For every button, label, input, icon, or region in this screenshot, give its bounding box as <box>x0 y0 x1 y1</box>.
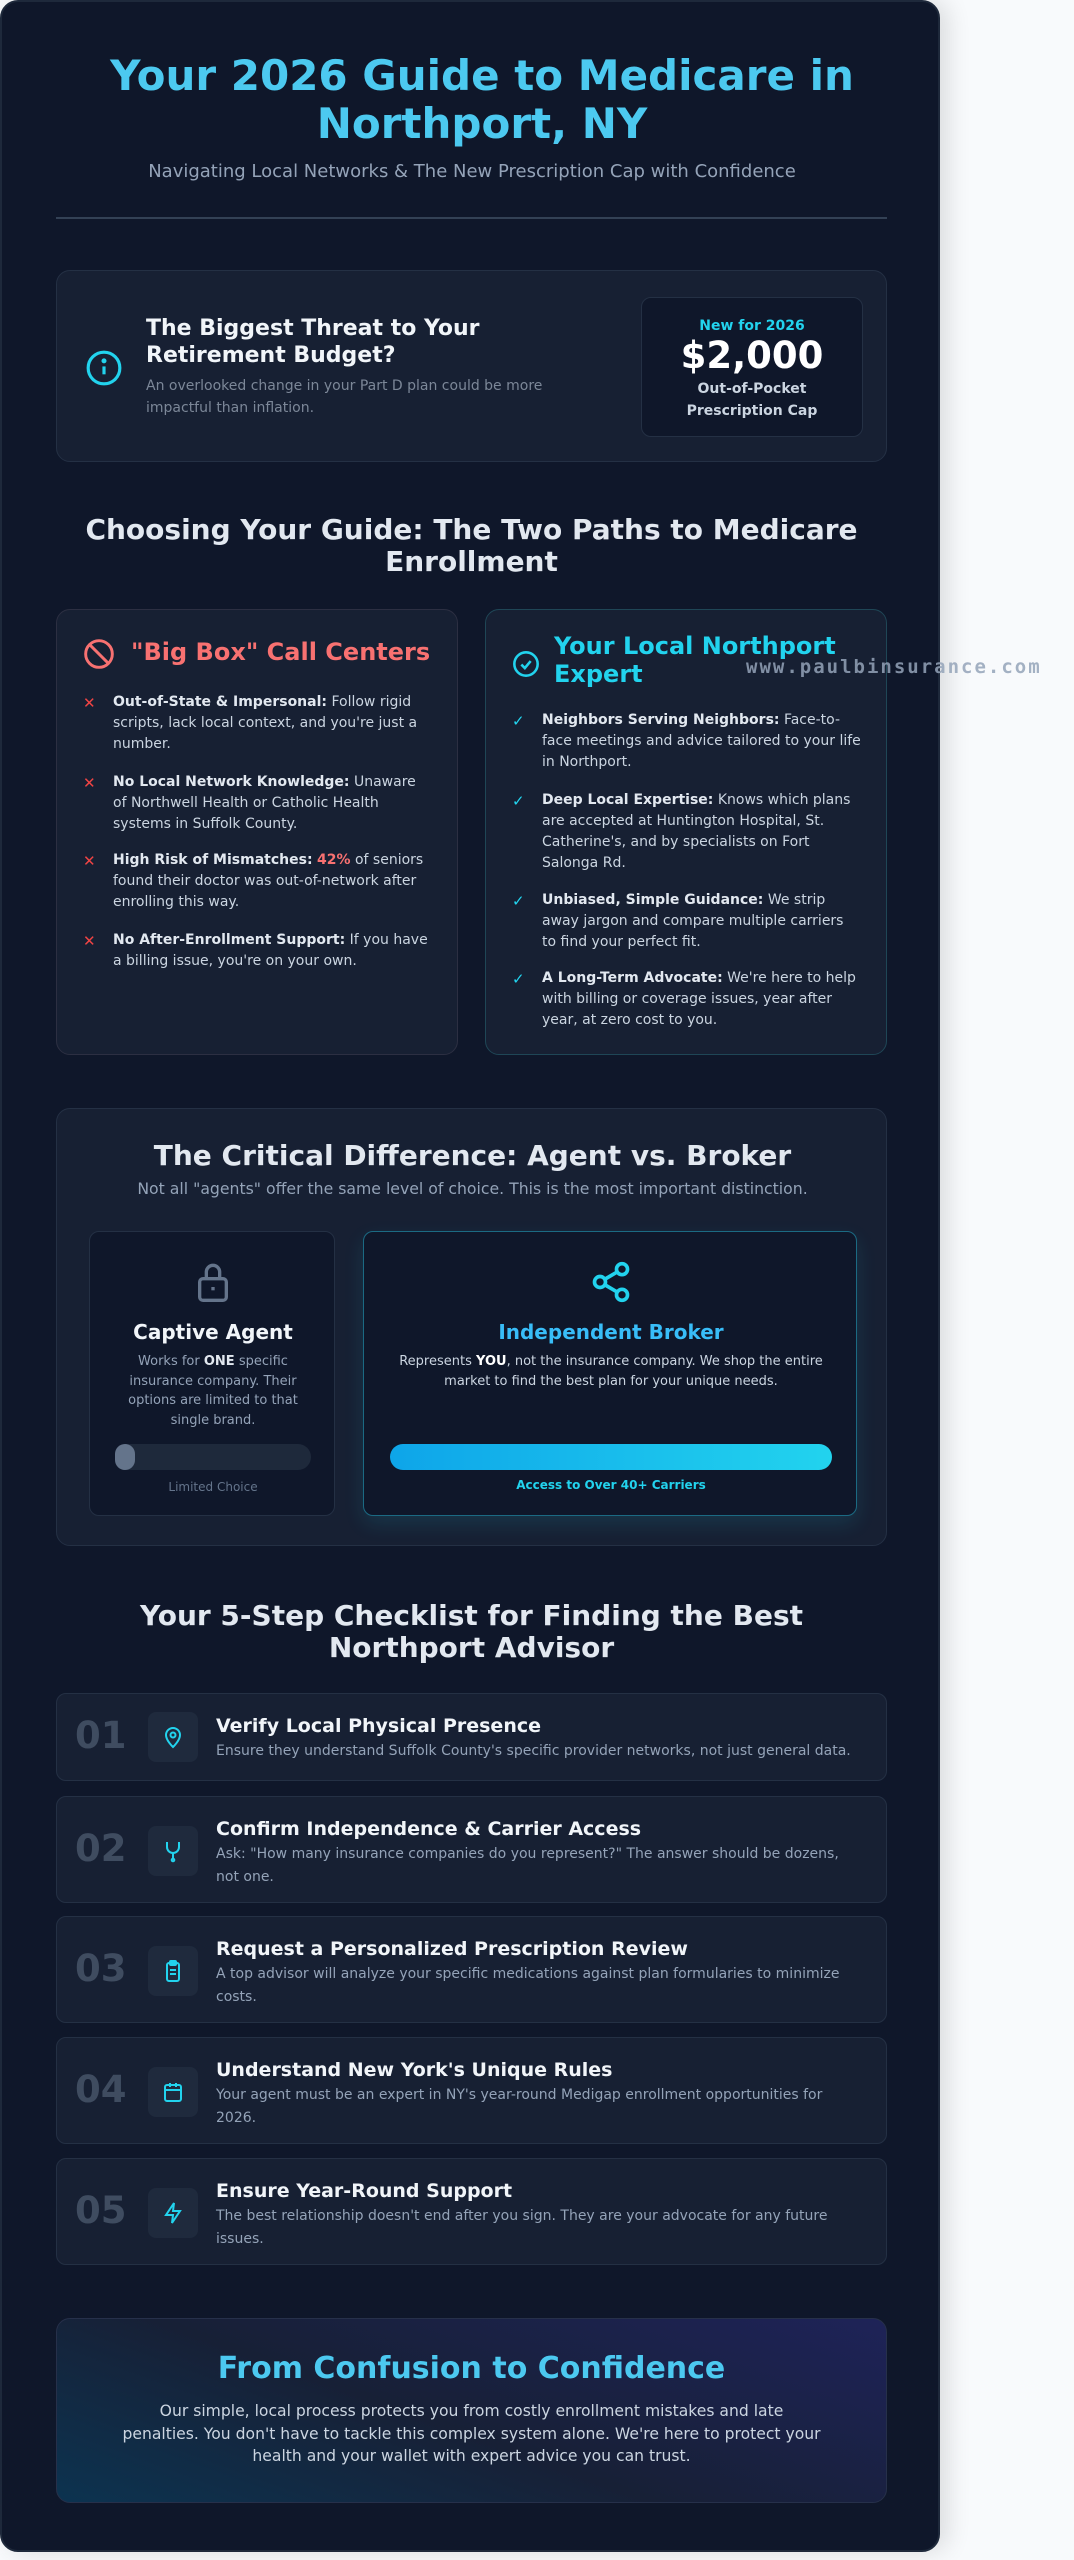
step 03: Request a Personalized Prescription Review <box>216 1938 688 1960</box>
heading: checklist <box>140 1599 803 1664</box>
step 04 <box>56 2037 887 2144</box>
icon: calendar <box>148 2067 198 2117</box>
footer callout: Our simple, local process protects you from costly enrollment mistakes and late <box>160 2402 783 2420</box>
step 05 <box>56 2158 887 2265</box>
bullet list: ✕ <box>83 774 96 792</box>
title: Northport, NY <box>317 99 647 148</box>
bullet list: ✕ <box>83 694 96 712</box>
icon: clipboard <box>148 1946 198 1996</box>
bullet list <box>83 694 428 969</box>
footer callout: penalties. You don't have to tackle this complex system alone. We're here to protect your <box>122 2424 821 2442</box>
step 03: 03 <box>75 1947 126 1990</box>
threat heading: The Biggest Threat to Your Retirement Budget? <box>146 316 480 368</box>
card: captive agent: Works for ONE specific insurance company. Their options are limited to that single brand. <box>128 1354 298 1428</box>
step 04: Your agent must be an expert in NY's year-round Medigap enrollment opportunities for 2026. <box>216 2087 822 2126</box>
bullet list: A Long-Term Advocate: We're here to help with billing or coverage issues, year after year, at zero cost to you. <box>542 970 856 1028</box>
panel title: Your Local Northport Expert <box>554 632 836 688</box>
bullet list: No After-Enrollment Support: If you have a billing issue, you're on your own. <box>113 932 428 969</box>
icon: check circle <box>513 651 539 677</box>
bullet list: ✓ <box>512 712 525 730</box>
bullet list: ✕ <box>83 852 96 870</box>
footer callout: From Confusion to Confidence <box>218 2351 725 2386</box>
bullet list: to find your perfect fit. <box>542 934 701 950</box>
threat text: An overlooked change in your Part D plan could be more impactful than inflation. <box>146 378 542 416</box>
step 04: 04 <box>75 2068 126 2111</box>
step 01 <box>56 1693 887 1781</box>
footer callout: health and your wallet with expert advice you can trust. <box>252 2447 691 2465</box>
stat box: $2,000 cap <box>641 297 863 437</box>
step 04: Understand New York's Unique Rules <box>216 2059 612 2081</box>
watermark: www.paulbinsurance.com <box>746 656 1042 678</box>
step 03: A top advisor will analyze your specific medications against plan formularies to minimize costs. <box>216 1966 839 2005</box>
icon: lightning <box>148 2188 198 2238</box>
step 05: The best relationship doesn't end after you sign. They are your advocate for any future issues. <box>216 2208 827 2247</box>
icon: prohibited <box>84 639 114 669</box>
card: captive agent <box>89 1231 335 1516</box>
card: independent broker: Represents YOU, not the insurance company. We shop the entire market to find the best plan for your unique needs. <box>399 1354 823 1389</box>
title: Your 2026 Guide to Medicare in <box>110 51 854 100</box>
card: independent broker <box>363 1231 857 1516</box>
stat box: $2,000 cap: Prescription Cap <box>687 403 817 419</box>
step 01: 01 <box>75 1714 126 1757</box>
heading: checklist: Northport Advisor <box>329 1631 614 1664</box>
icon: stethoscope <box>148 1826 198 1876</box>
panel title: "Big Box" Call Centers <box>131 638 430 666</box>
card: captive agent: Limited Choice <box>168 1480 258 1494</box>
stat box: $2,000 cap: Out-of-Pocket <box>698 381 806 397</box>
step 01: Ensure they understand Suffolk County's specific provider networks, not just general data. <box>216 1743 851 1759</box>
bullet list: Unbiased, Simple Guidance: We strip away jargon and compare multiple carriers <box>542 892 843 929</box>
bar: full access <box>390 1444 832 1470</box>
bullet list: ✓ <box>512 792 525 810</box>
bullet list: ✕ <box>83 932 96 950</box>
bullet list: High Risk of Mismatches: 42% of seniors found their doctor was out-of-network after enrolling this way. <box>113 852 423 910</box>
card: independent broker: Independent Broker <box>498 1320 724 1344</box>
bullet list <box>512 712 861 1028</box>
icon: share network <box>592 1262 630 1302</box>
footer callout <box>56 2318 887 2503</box>
title <box>110 51 854 148</box>
card: independent broker: Access to Over 40+ Carriers <box>516 1478 706 1492</box>
icon: map pin <box>148 1712 198 1762</box>
subtitle: Navigating Local Networks & The New Prescription Cap with Confidence <box>148 161 796 182</box>
step 02: 02 <box>75 1827 126 1870</box>
bullet list: Deep Local Expertise: Knows which plans are accepted at Huntington Hospital, St. Catherine's, and by specialists on Fort Salonga Rd. <box>542 792 850 871</box>
step 05: 05 <box>75 2189 126 2232</box>
heading: two paths: Choosing Your Guide: The Two Paths to Medicare Enrollment <box>85 513 858 578</box>
stat box: $2,000 cap: $2,000 <box>681 334 823 377</box>
bullet list: ✓ <box>512 892 525 910</box>
step 01: Verify Local Physical Presence <box>216 1715 541 1737</box>
card: captive agent: Captive Agent <box>133 1320 293 1344</box>
bullet list: Out-of-State & Impersonal: Follow rigid scripts, lack local context, and you're just a number. <box>113 694 417 752</box>
panel: local expert <box>485 609 887 1055</box>
icon: info <box>86 350 122 386</box>
heading: checklist: Your 5-Step Checklist for Finding the Best <box>140 1599 803 1632</box>
panel: agent vs broker <box>56 1108 887 1546</box>
heading: The Critical Difference: Agent vs. Broker <box>154 1139 791 1172</box>
stat box: $2,000 cap: New for 2026 <box>699 318 805 334</box>
bullet list: Neighbors Serving Neighbors: Face-to-face meetings and advice tailored to your life in Northport. <box>542 712 861 770</box>
panel: biggest threat <box>56 270 887 462</box>
step 03 <box>56 1916 887 2023</box>
panel: big box call centers <box>56 609 458 1055</box>
step 02 <box>56 1796 887 1903</box>
step 02: Confirm Independence & Carrier Access <box>216 1818 641 1840</box>
icon: lock <box>198 1264 228 1302</box>
bullet list: ✓ <box>512 970 525 988</box>
bar: limited choice <box>115 1444 311 1470</box>
step 02: Ask: "How many insurance companies do you represent?" The answer should be dozens, not one. <box>216 1846 839 1885</box>
bullet list: No Local Network Knowledge: Unaware of Northwell Health or Catholic Health systems in Suffolk County. <box>113 774 416 832</box>
step 05: Ensure Year-Round Support <box>216 2180 512 2202</box>
subheading: Not all "agents" offer the same level of choice. This is the most important distinction. <box>137 1179 808 1198</box>
